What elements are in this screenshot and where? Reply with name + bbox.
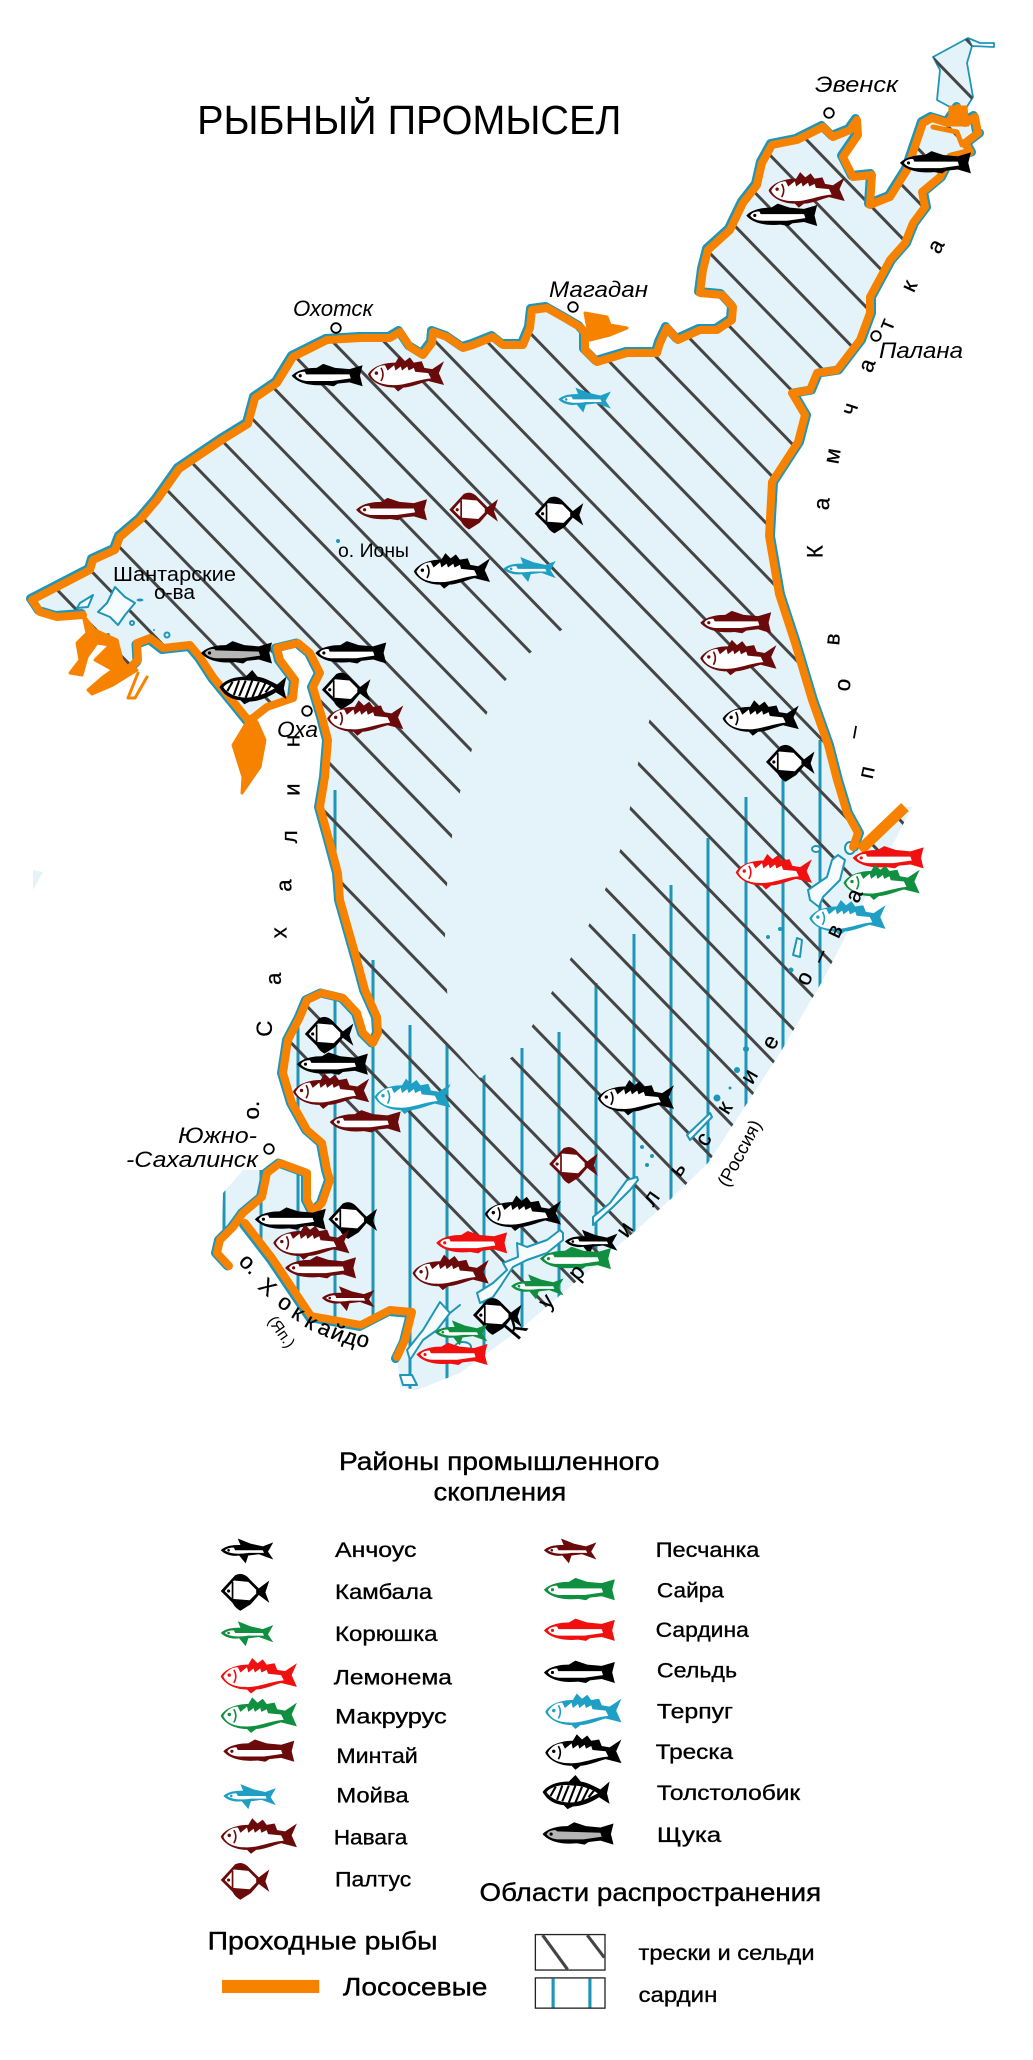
icon: Корюшка bbox=[221, 1621, 273, 1646]
icon: Толстолобик bbox=[219, 670, 286, 704]
label: о. Сахалин bbox=[239, 735, 305, 1119]
label: Щука: Щука bbox=[657, 1824, 722, 1847]
icon: Песчанка bbox=[322, 1286, 374, 1311]
label: о. Сахалин: и bbox=[280, 783, 305, 796]
label: Камчатка: м bbox=[818, 446, 846, 466]
label: Палана: Палана bbox=[879, 338, 963, 363]
label: сардин: сардин bbox=[639, 1984, 717, 2007]
label: Курильские о-ва: с bbox=[690, 1128, 717, 1150]
label: Курильские о-ва: К bbox=[498, 1312, 534, 1346]
label: о. Хоккайдо: а bbox=[314, 1314, 336, 1342]
label: Шантарские о-ва: о-ва bbox=[154, 582, 196, 604]
legend heading: Районы промышленного скопления: Районы промышленного bbox=[339, 1448, 660, 1476]
icon: Треска bbox=[723, 700, 799, 736]
icon: Навага bbox=[327, 700, 403, 736]
label: Курильские о-ва: е bbox=[756, 1030, 784, 1054]
legend: industrial fish, left column bbox=[221, 1538, 452, 1900]
legend heading: Районы промышленного скопления: скопления bbox=[434, 1478, 566, 1506]
icon: Макрурус bbox=[221, 1697, 297, 1733]
label: Палтус: Палтус bbox=[335, 1869, 411, 1892]
label: Лососевые: Лососевые bbox=[343, 1974, 487, 2002]
label: Толстолобик: Толстолобик bbox=[657, 1782, 801, 1805]
label: о. Хоккайдо: д bbox=[340, 1323, 361, 1351]
icon: Минтай bbox=[285, 1256, 356, 1278]
icon: Палтус bbox=[221, 1863, 269, 1900]
icon: Сардина bbox=[436, 1231, 507, 1253]
label: о. Хоккайдо bbox=[234, 1248, 372, 1353]
icon: Камбала bbox=[305, 1017, 353, 1054]
label: Макрурус: Макрурус bbox=[335, 1706, 447, 1729]
icon: Щука bbox=[543, 1822, 614, 1845]
fish icons on map bbox=[201, 151, 971, 1365]
label: Курильские о-ва: и bbox=[735, 1065, 763, 1088]
icon: Камбала bbox=[473, 1298, 522, 1335]
legend: sardine hatch swatch bbox=[535, 1978, 605, 2008]
faint pale sliver bbox=[33, 870, 43, 890]
label: Минтай: Минтай bbox=[336, 1745, 418, 1768]
label: о. Сахалин: о. bbox=[239, 1101, 264, 1119]
icon: Навага bbox=[293, 1073, 369, 1109]
icon: Сайра bbox=[544, 1578, 615, 1600]
label: Шантарские о-ва: Шантарские bbox=[113, 564, 236, 586]
icon: Мойва bbox=[558, 388, 611, 413]
icon: Щука bbox=[201, 641, 272, 663]
icon: Мойва bbox=[223, 1784, 276, 1809]
label: Курильские о-ва: л bbox=[637, 1185, 665, 1210]
sea area bbox=[32, 108, 978, 1390]
icon: Навага bbox=[413, 1255, 489, 1290]
label: Курильские о-ва: – bbox=[806, 944, 834, 967]
icon: Навага bbox=[769, 172, 845, 208]
label: Треска: Треска bbox=[656, 1741, 733, 1764]
icon: Палтус bbox=[549, 1147, 598, 1184]
icon: Лемонема bbox=[736, 854, 812, 889]
label: Курильские о-ва: а bbox=[840, 884, 868, 906]
icon: Макрурус bbox=[843, 864, 920, 900]
label: Курильские о-ва: и bbox=[611, 1217, 638, 1242]
label: Камбала: Камбала bbox=[335, 1581, 433, 1604]
icon: Сельдь bbox=[297, 1052, 368, 1075]
label: Южно-Сахалинск: Южно- bbox=[178, 1123, 257, 1148]
northern bay inlet bbox=[968, 38, 994, 47]
icon: Треска bbox=[545, 1734, 621, 1770]
label: Курильские о-ва: в bbox=[820, 920, 848, 942]
label: о. Хоккайдо: к bbox=[287, 1300, 309, 1326]
label: о. Хоккайдо: к bbox=[301, 1308, 322, 1335]
label: п-ов: в bbox=[819, 632, 845, 646]
label: Южно-Сахалинск: -Сахалинск bbox=[126, 1147, 260, 1172]
icon: Терпуг bbox=[374, 1079, 451, 1114]
icon: Анчоус bbox=[221, 1538, 273, 1563]
label: Терпуг: Терпуг bbox=[657, 1700, 733, 1723]
icon: Сельдь bbox=[255, 1207, 326, 1230]
icon: Сардина bbox=[416, 1343, 487, 1365]
icon: Треска bbox=[485, 1196, 561, 1231]
label: о. Сахалин: а bbox=[261, 972, 286, 985]
label: Курильские о-ва bbox=[498, 884, 868, 1346]
icon: Навага bbox=[368, 356, 444, 392]
label: Камчатка: а bbox=[921, 234, 950, 257]
label: Камчатка: т bbox=[873, 315, 900, 334]
label: Эвенск: Эвенск bbox=[815, 72, 900, 97]
icon: Сельдь bbox=[746, 204, 817, 226]
icon: Навага bbox=[273, 1224, 349, 1260]
label: Курильские о-ва: ь bbox=[663, 1157, 691, 1181]
label: о. Хоккайдо: й bbox=[327, 1319, 348, 1347]
legend heading: Районы промышленного скопления bbox=[339, 1448, 660, 1506]
label: (Россия): (Россия) bbox=[713, 1116, 765, 1190]
label: Камчатка: а bbox=[809, 496, 835, 511]
label: Камчатка: к bbox=[896, 276, 922, 296]
label: п-ов: – bbox=[840, 723, 867, 740]
label: Курильские о-ва: к bbox=[711, 1097, 737, 1118]
label: о. Сахалин: л bbox=[277, 830, 302, 843]
central area without cod and herring bbox=[445, 629, 650, 1078]
label: Оха: Оха bbox=[277, 717, 318, 742]
label: Магадан: Магадан bbox=[549, 277, 648, 302]
city markers bbox=[264, 108, 881, 1154]
label: Южно-Сахалинск bbox=[126, 1123, 260, 1172]
label: о. Сахалин: н bbox=[280, 735, 305, 747]
icon: Сардина bbox=[544, 1619, 615, 1641]
icon: Сайра bbox=[540, 1247, 611, 1269]
sardine range hatching bbox=[224, 740, 820, 1400]
label: Шантарские о-ва bbox=[113, 564, 236, 604]
label: Сельдь: Сельдь bbox=[657, 1660, 737, 1683]
label: Курильские о-ва: о bbox=[790, 967, 818, 989]
icon: Треска bbox=[598, 1080, 674, 1115]
label: трески и сельди: трески и сельди bbox=[639, 1942, 815, 1965]
label: Камчатка: ч bbox=[836, 400, 863, 418]
legend: cod and herring hatch swatch bbox=[535, 1935, 605, 1970]
label: Корюшка: Корюшка bbox=[335, 1623, 438, 1646]
legend heading: Области распространения: Области распространения bbox=[480, 1879, 821, 1907]
orange land-locked blobs bbox=[70, 107, 968, 793]
label: Курильские о-ва: у bbox=[533, 1288, 560, 1313]
icon: Сельдь bbox=[900, 151, 971, 173]
label: Сардина: Сардина bbox=[656, 1619, 749, 1642]
label: о. Хоккайдо: о bbox=[354, 1326, 372, 1353]
icon: Камбала bbox=[328, 1202, 377, 1239]
icon: Минтай bbox=[700, 611, 771, 633]
label: о. Хоккайдо: о. bbox=[234, 1248, 265, 1279]
icon: Терпуг bbox=[809, 900, 886, 935]
icon: Сельдь bbox=[292, 364, 363, 386]
icon: Мойва bbox=[503, 557, 556, 582]
icon: Палтус bbox=[449, 493, 498, 529]
label: п-ов: п bbox=[853, 764, 880, 781]
label: Курильские о-ва: р bbox=[563, 1259, 590, 1285]
islands bbox=[77, 587, 855, 1385]
label: о. Ионы: о. Ионы bbox=[338, 541, 409, 562]
icon: Корюшка bbox=[511, 1274, 564, 1299]
label: Камчатка bbox=[802, 234, 950, 558]
label: о. Сахалин: х bbox=[266, 927, 291, 938]
legend: industrial fish, right column bbox=[543, 1538, 801, 1847]
icon: Сельдь bbox=[315, 641, 386, 663]
label: Сайра: Сайра bbox=[657, 1580, 724, 1603]
label: Песчанка: Песчанка bbox=[656, 1539, 760, 1562]
icon: Минтай bbox=[356, 498, 427, 520]
icon: Камбала bbox=[322, 673, 370, 709]
coastline: salmon migration bbox=[32, 108, 978, 1357]
icon: Камбала bbox=[221, 1574, 269, 1611]
label: о. Хоккайдо: о bbox=[273, 1289, 298, 1316]
legend heading: Проходные рыбы: Проходные рыбы bbox=[208, 1928, 437, 1956]
title: РЫБНЫЙ ПРОМЫСЕЛ bbox=[197, 97, 621, 143]
icon: Песчанка bbox=[544, 1538, 596, 1563]
icon: Толстолобик bbox=[543, 1775, 610, 1809]
icon: Треска bbox=[414, 553, 490, 589]
label: п-ов bbox=[819, 632, 880, 781]
label: (Яп.): (Яп.) bbox=[264, 1313, 298, 1351]
label: о. Хоккайдо: Х bbox=[254, 1273, 281, 1301]
icon: Сельдь bbox=[544, 1661, 615, 1683]
label: п-ов: о bbox=[829, 677, 856, 693]
coastline teal edge bbox=[30, 106, 980, 1358]
cod and herring range hatching bbox=[56, 38, 973, 1308]
label: о. Сахалин: С bbox=[252, 1021, 277, 1037]
label: о. Сахалин: а bbox=[272, 879, 297, 892]
icon: Анчоус bbox=[565, 1230, 617, 1255]
label: Охотск: Охотск bbox=[293, 296, 375, 321]
icon: Минтай bbox=[330, 1110, 401, 1132]
icon: Сардина bbox=[853, 846, 924, 868]
label: Камчатка: а bbox=[853, 355, 881, 375]
icon: Навага bbox=[700, 640, 776, 675]
northern bay of sea bbox=[933, 38, 973, 110]
label: Навага: Навага bbox=[334, 1827, 408, 1850]
label: Камчатка: К bbox=[802, 545, 827, 558]
icon: Минтай bbox=[223, 1739, 294, 1762]
icon: Лемонема bbox=[221, 1658, 297, 1693]
label: Мойва: Мойва bbox=[336, 1785, 409, 1808]
icon: Терпуг bbox=[545, 1693, 621, 1729]
icon: Корюшка bbox=[435, 1320, 487, 1345]
icon: Камбала bbox=[535, 497, 583, 533]
island marker: о. Ионы bbox=[336, 539, 340, 543]
label: Лемонема: Лемонема bbox=[334, 1666, 452, 1689]
icon: Камбала bbox=[766, 745, 815, 782]
label: Анчоус: Анчоус bbox=[335, 1539, 416, 1562]
legend: salmon line swatch bbox=[222, 1980, 319, 1993]
icon: Навага bbox=[221, 1818, 297, 1854]
panel: sea map bbox=[26, 37, 995, 1390]
